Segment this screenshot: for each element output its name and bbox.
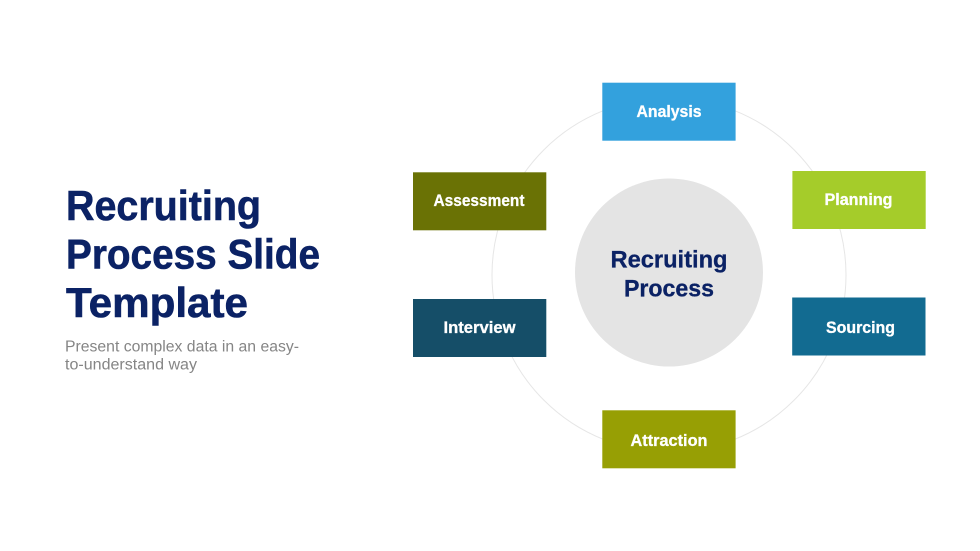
box: Sourcing: Sourcing <box>826 319 895 337</box>
subtitle text: to-understand way <box>65 356 197 374</box>
box: Interview: Interview <box>444 319 516 337</box>
box: Assessment: Assessment <box>434 192 525 210</box>
title: Recruiting <box>66 182 261 229</box>
box: Planning: Planning <box>824 191 892 209</box>
center circle: Recruiting Process: Recruiting <box>610 246 728 274</box>
title: Template <box>66 279 248 326</box>
box: Attraction: Attraction <box>630 432 708 450</box>
subtitle text <box>65 338 299 374</box>
center circle: Recruiting Process <box>575 178 763 366</box>
box: Planning <box>792 171 926 229</box>
subtitle text: Present complex data in an easy- <box>65 338 299 356</box>
box: Attraction <box>602 410 736 468</box>
box: Analysis <box>602 83 736 141</box>
title <box>66 182 320 326</box>
connecting ring <box>492 98 846 452</box>
box: Analysis: Analysis <box>636 103 702 121</box>
title: Process Slide <box>66 230 320 278</box>
box: Assessment <box>413 172 546 230</box>
box: Interview <box>413 299 546 357</box>
center circle: Recruiting Process: Process <box>624 276 714 302</box>
box: Sourcing <box>792 298 926 356</box>
